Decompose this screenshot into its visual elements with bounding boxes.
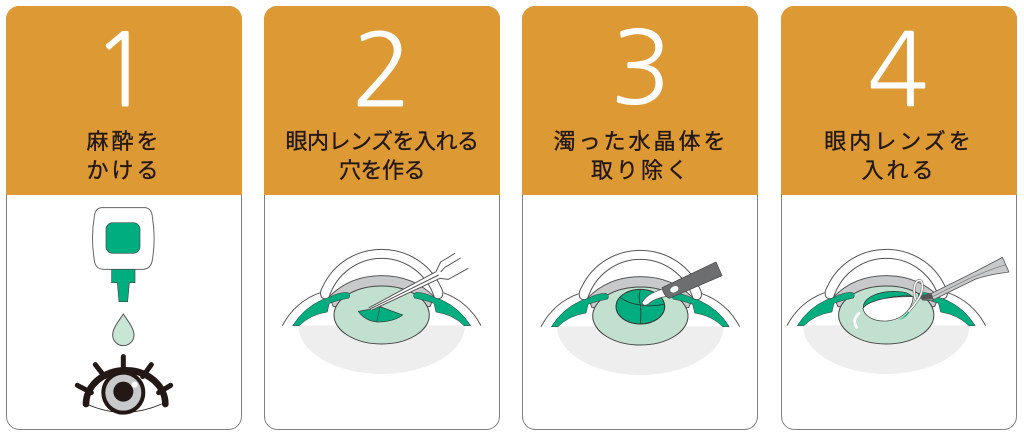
illustration: eye with emulsifying probe [541, 250, 740, 375]
icon: eye drop bottle [92, 208, 154, 302]
forceps [369, 253, 468, 310]
heading: 眼内レンズを入れる [824, 129, 974, 183]
panel 3: remove lens [522, 6, 758, 430]
panel 1: anesthesia [6, 6, 242, 430]
heading: 眼内レンズを入れる穴を作る: 穴を作る [339, 158, 425, 183]
cracked lens nucleus [616, 289, 665, 324]
icon: open eye [77, 357, 171, 413]
heading: 濁った水晶体を取り除く: 取り除く [591, 158, 691, 183]
heading: 濁った水晶体を取り除く [553, 129, 729, 183]
heading: 麻酔をかける: 麻酔を [86, 129, 162, 154]
heading: 濁った水晶体を取り除く: 濁った水晶体を [553, 129, 729, 154]
step number 2: 2 [351, 20, 413, 121]
illustration: eye with incision and forceps [282, 249, 481, 374]
heading: 眼内レンズを入れる穴を作る: 眼内レンズを入れる [285, 129, 479, 154]
probe [642, 262, 722, 305]
heading: 眼内レンズを入れる: 入れる [861, 158, 937, 183]
heading: 麻酔をかける: かける [86, 158, 162, 183]
panel 4: insert lens [781, 6, 1017, 430]
panel 2: make incision [264, 6, 500, 430]
intraocular lens and injector [855, 257, 1009, 327]
icon: falling drop [113, 314, 134, 346]
step number 4: 4 [867, 20, 929, 121]
heading: 眼内レンズを入れる穴を作る [285, 129, 479, 183]
panel 2 header band [264, 6, 500, 195]
step number 1: 1 [91, 20, 153, 121]
step number 3: 3 [610, 18, 672, 119]
panel 1 header band [6, 6, 242, 195]
heading: 眼内レンズを入れる: 眼内レンズを [824, 129, 974, 154]
incision wedge [358, 307, 403, 322]
panel 3 header band [522, 6, 758, 195]
illustration: eye with intraocular lens [787, 249, 986, 374]
panel 4 header band [781, 6, 1017, 195]
heading: 麻酔をかける [86, 129, 162, 183]
